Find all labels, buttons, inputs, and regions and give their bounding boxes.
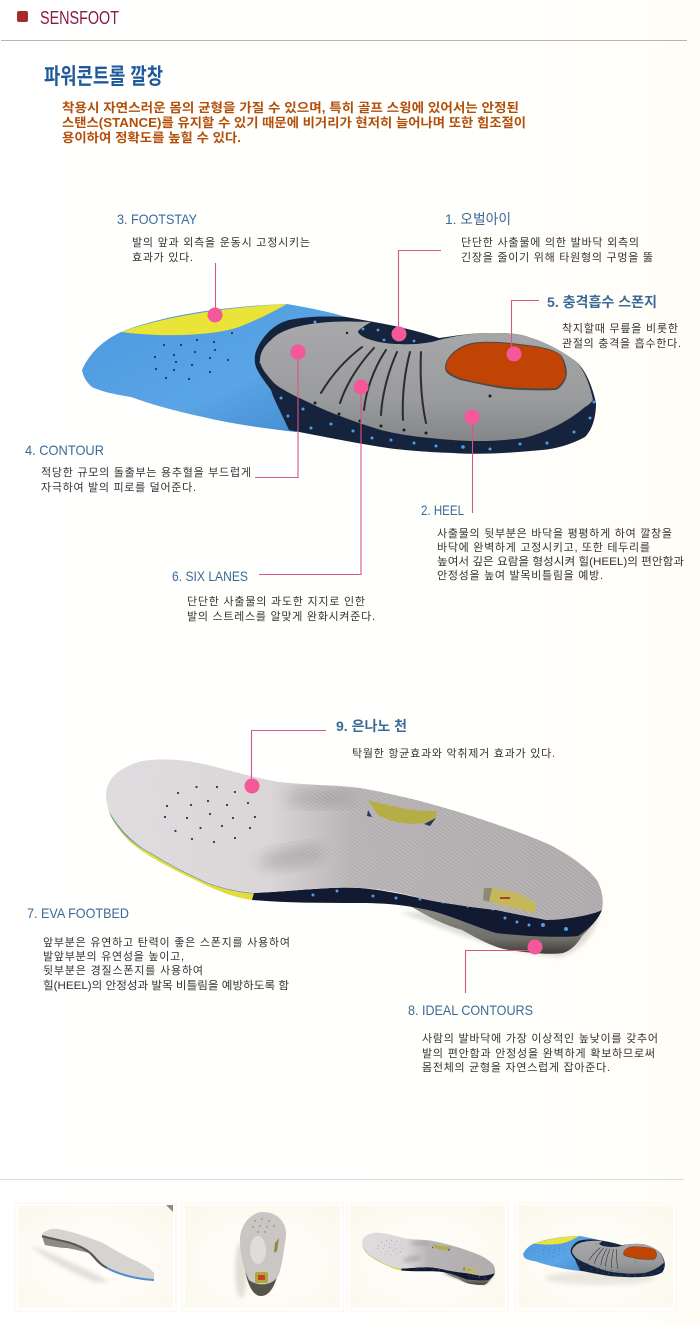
callout 4: contour: 적당한 규모의 돌출부는 용추혈을 부드럽게 [41, 465, 251, 479]
callout 7: EVA footbed: 7. EVA FOOTBED [27, 905, 129, 921]
rim blue dots [260, 320, 596, 450]
callout 7: EVA footbed: 앞부분은 유연하고 탄력이 좋은 스폰지를 사용하여 [43, 935, 290, 949]
blue forefoot base [82, 304, 346, 432]
thumbnail 3: fabric top [347, 1203, 508, 1311]
ventilation holes [164, 786, 256, 843]
callout 7: EVA footbed: 힐(HEEL)의 안정성과 발목 비틀림을 예방하도록 함 [43, 978, 289, 992]
callout 7: EVA footbed: 발앞부분의 유연성을 높이고, [43, 950, 184, 963]
callout 6: six lanes: 6. SIX LANES [172, 568, 248, 584]
callout 8: ideal contours: 사람의 발바닥에 가장 이상적인 높낮이를 갖추어 [422, 1032, 658, 1045]
callout 2: heel [421, 410, 684, 582]
heading: 3. FOOTSTAY [117, 211, 198, 227]
callout 4: contour: 자극하여 발의 피로를 덜어준다. [41, 480, 196, 494]
intro text [62, 100, 526, 145]
callout 5: shock absorbing sponge: 착지할때 무릎을 비롯한 [562, 322, 678, 335]
intro text: 착용시 자연스러운 몸의 균형을 가질 수 있으며, 특히 골프 스윙에 있어서는 안정된 [62, 100, 519, 115]
thumbnail 1: side view [15, 1203, 176, 1311]
thumbnail 2: rear view [182, 1203, 343, 1311]
callout 1: oval eye: 단단한 사출물에 의한 발바닥 외측의 [461, 236, 639, 249]
header: brand [17, 8, 119, 28]
insole illustration: fabric top with heel wedge [106, 759, 603, 957]
callout 1: oval eye [392, 211, 653, 342]
brand name: SENSFOOT [40, 8, 119, 28]
callout 8: ideal contours: 8. IDEAL CONTOURS [408, 1002, 533, 1018]
callout 9: silver nano fabric [244, 718, 555, 794]
callout 5: shock absorbing sponge [506, 294, 681, 362]
forefoot holes [154, 332, 233, 380]
callout 8: ideal contours [408, 940, 658, 1074]
arch shadow [257, 841, 327, 873]
callout 5: shock absorbing sponge: 5. 충격흡수 스폰지 [547, 294, 657, 310]
fabric top surface [106, 759, 603, 920]
small drain holes [314, 332, 492, 434]
title: 파워콘트롤 깔창 [44, 64, 163, 89]
callout 8: ideal contours: 몸전체의 균형을 자연스럽게 잡아준다. [422, 1060, 610, 1074]
six lane grooves [321, 347, 426, 423]
icon: red square bullet [17, 11, 28, 22]
callout 4: contour [25, 344, 306, 494]
callout 3: footstay: 효과가 있다. [132, 251, 193, 264]
intro text: 용이하여 정확도를 높힐 수 있다. [62, 130, 241, 145]
callout 2: heel: 안정성을 높여 발목비틀림을 예방. [437, 569, 603, 582]
callout 2: heel: 바닥에 완벽하게 고정시키고, 또한 테두리를 [437, 540, 650, 554]
insole illustration: top view with colored forefoot [82, 304, 596, 454]
yellow and blue foam edge [108, 808, 254, 900]
callout 4: contour: 4. CONTOUR [25, 442, 104, 458]
callout 1: oval eye: 긴장을 줄이기 위해 타원형의 구멍을 뚫 [461, 250, 653, 264]
thumbnail strip [15, 1203, 676, 1311]
arch hole blue dots [362, 328, 415, 342]
orange shock pad [445, 342, 567, 390]
callout 8: ideal contours: 발의 편안함과 안정성을 완벽하게 확보하므로써 [422, 1046, 655, 1060]
callout 3: footstay [117, 211, 310, 322]
callout 7: EVA footbed: 뒷부분은 경질스폰지를 사용하여 [43, 963, 203, 977]
callout 9: silver nano fabric: 탁월한 항균효과와 악취제거 효과가 있다. [352, 747, 555, 760]
callout 1: oval eye: 1. 오벌아이 [445, 211, 511, 227]
navy side band [248, 888, 602, 937]
grey arch and heel cup [260, 322, 593, 441]
callout 9: silver nano fabric: 9. 은나노 천 [336, 718, 407, 734]
band blue dots [312, 890, 568, 931]
thumbnail 4: colored underside [515, 1203, 676, 1311]
gold label: power control [368, 800, 437, 824]
dark navy rim [255, 316, 596, 454]
callout 2: heel: 높여서 깊은 요람을 형성시켜 힐(HEEL)의 편안함과 [437, 555, 684, 568]
callout 2: heel: 2. HEEL [421, 502, 464, 518]
heel badge [484, 888, 536, 913]
callout 6: six lanes: 발의 스트레스를 알맞게 완화시켜준다. [187, 609, 375, 623]
fabric weave [106, 759, 603, 920]
callout 5: shock absorbing sponge: 관절의 충격을 흡수한다. [562, 336, 681, 350]
ground shadow [400, 912, 600, 957]
yellow forefoot patch [121, 304, 287, 335]
callout 7: EVA footbed [27, 905, 290, 992]
grey heel wedge [405, 903, 600, 954]
description: 발의 앞과 외측을 운동시 고정시키는 [132, 236, 310, 249]
callout 2: heel: 사출물의 뒷부분은 바닥을 평평하게 하여 깔창을 [437, 526, 672, 540]
intro text: 스탠스(STANCE)를 유지할 수 있기 때문에 비거리가 현저히 늘어나며 또한 힘조절이 [62, 115, 526, 130]
callout 6: six lanes [172, 380, 375, 623]
callout 6: six lanes: 단단한 사출물의 과도한 지지로 인한 [187, 595, 365, 608]
